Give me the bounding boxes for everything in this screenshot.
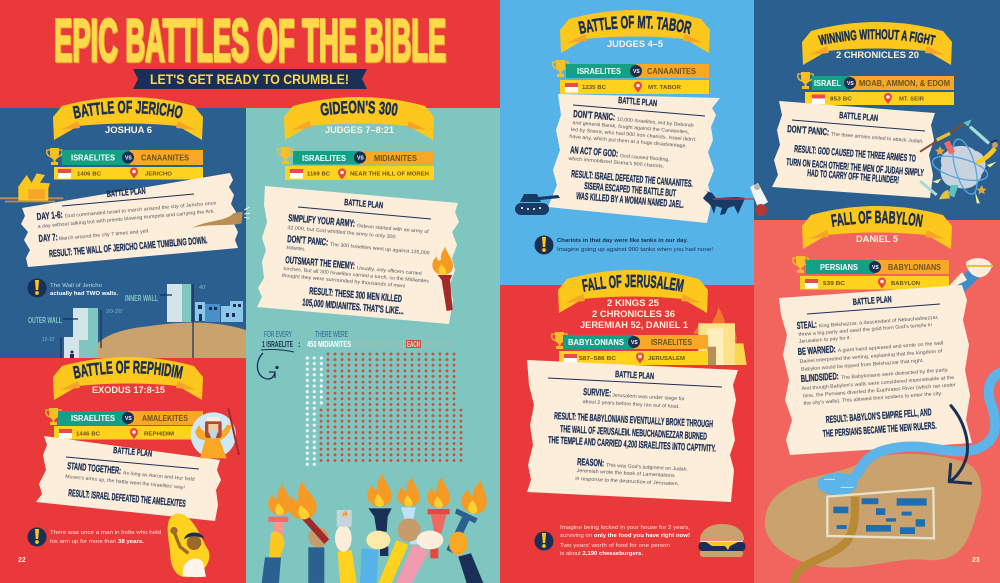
reference: JUDGES 7–8:21 <box>325 125 395 136</box>
banner: Battle of Mt. Tabor: BATTLE OF MT. TABOR <box>578 16 692 34</box>
battle plan text <box>796 311 957 440</box>
battle plan text: THE TEMPLE AND CARRIED 4,200 ISRAELITES INTO CAPTIVITY. <box>548 435 716 455</box>
battle plan text: 105,000 MIDIANITES. THAT'S LIKE... <box>302 297 404 317</box>
icon: tank <box>515 194 560 215</box>
lighter <box>335 510 357 583</box>
battle plan heading <box>548 369 722 387</box>
matchup bars: ISRAEL <box>814 79 841 88</box>
paper note <box>779 285 972 455</box>
illustration: hand writing on the wall <box>948 258 993 296</box>
references: JEREMIAH 52, DANIEL 1 <box>580 320 689 331</box>
chart: wall heights: INNER WALL <box>125 293 158 303</box>
battle plan text <box>548 387 716 488</box>
background panel: Jericho blue <box>0 108 246 358</box>
matchup bars: VS <box>872 265 879 271</box>
background panel: title red <box>0 0 500 108</box>
battle plan text: RESULT: ISRAEL DEFEATED THE AMELEKITES <box>68 488 186 510</box>
reference: 2 CHRONICLES 20 <box>836 50 919 61</box>
battle plan text: And though Babylon's walls were considered impenetrable at the <box>801 375 955 392</box>
panel: Battle of Mt. Tabor <box>515 10 754 254</box>
icon: torch <box>432 247 453 311</box>
map: sand ground <box>765 454 981 568</box>
page number: 23 <box>972 557 980 564</box>
matchup bars <box>47 148 203 180</box>
torch 6 <box>396 477 450 583</box>
matchup bars <box>793 256 949 290</box>
matchup bars: MIDIANITES <box>374 154 418 163</box>
matchup bars: VS <box>125 416 132 422</box>
battle plan text <box>65 461 195 510</box>
fact: chariots <box>534 236 714 254</box>
panel: Fall of Babylon <box>765 206 1000 583</box>
battle plan text <box>282 213 431 317</box>
matchup bars: NEAR THE HILL OF MOREH <box>350 172 429 178</box>
torch 7 <box>449 477 491 583</box>
battle plan text: DAY 7: <box>38 232 58 245</box>
battle plan text <box>786 124 924 186</box>
battle plan heading <box>298 197 431 219</box>
battle plan text: King Belshazzar, a descendant of Nebuchadnezzar, <box>819 315 939 329</box>
paper note <box>527 360 738 502</box>
matchup bars: VS <box>631 340 638 346</box>
reference: EXODUS 17:8-15 <box>92 385 166 396</box>
battle plan heading <box>792 110 925 131</box>
background panel: Rephidim red <box>0 358 246 583</box>
background panel: Gideon teal <box>246 108 500 583</box>
fact: cheeseburgers: Two years' worth of food for one person <box>560 543 670 549</box>
battle plan heading <box>807 294 940 314</box>
battle plan text: SURVIVE: <box>583 387 611 399</box>
matchup bars <box>46 408 203 440</box>
matchup bars: ISRAELITES <box>302 154 347 163</box>
chart: wall heights: 40' <box>199 285 206 291</box>
matchup bars: VS <box>633 69 640 75</box>
arrow <box>949 406 971 483</box>
matchup bars: VS <box>847 81 854 87</box>
battle plan text: which immobilized Sisera's 900 chariots. <box>568 156 664 170</box>
battle plan text: Usually, only officers carried <box>357 265 422 277</box>
battle plan text: Daniel interpreted the writing, explaining that the kingdom of <box>799 348 943 365</box>
battle plan text: have any, which put them at a huge disadvantage. <box>569 134 687 149</box>
battle plan text: Jerusalem was under siege for <box>612 393 685 402</box>
matchup bars <box>798 72 954 105</box>
banner: Fall of Babylon <box>802 206 952 249</box>
banner: Fall of Jerusalem: FALL OF JERUSALEM <box>582 274 684 292</box>
background panel: Babylon salmon <box>754 220 1000 583</box>
battle plan heading <box>66 445 199 469</box>
battle plan text: torches. But all 300 Israelites carried a torch, so the Midianites <box>283 266 430 285</box>
battle plan heading: BATTLE PLAN <box>344 197 384 210</box>
ratio label: A SINGLE ONE <box>423 340 452 349</box>
matchup bars: CANAANITES <box>647 67 697 76</box>
matchup bars: 587–586 BC <box>579 356 616 362</box>
panel: Battle of Jericho <box>0 97 250 358</box>
battle plan text: A giant hand appeared and wrote on the wall. <box>838 340 945 354</box>
background panel: Tabor sky blue <box>500 0 754 285</box>
ratio label: THERE WERE <box>315 330 348 339</box>
battle plan text: Jeremiah wrote the book of Lamentations <box>577 468 675 479</box>
river Euphrates <box>817 372 1000 495</box>
ratio label: 1 ISRAELITE <box>262 340 293 349</box>
battle plan text: STAND TOGETHER: <box>67 461 122 477</box>
matchup bars: VS <box>125 156 132 162</box>
battle plan text: REASON: <box>577 457 604 469</box>
banner: Winning Without a Fight: WINNING WITHOUT A FIGHT <box>818 29 936 46</box>
fact: cheeseburgers: Imagine being locked in your house for 2 years, <box>560 525 691 531</box>
matchup bars: CANAANITES <box>141 154 190 162</box>
banner: Fall of Babylon: FALL OF BABYLON <box>830 210 924 228</box>
icon: cheeseburger <box>698 524 746 557</box>
chart: wall heights: 20-26' <box>106 309 123 315</box>
background panel: Jerusalem red <box>500 285 754 583</box>
illustration: man with raised arm <box>168 513 209 577</box>
chart: wall heights: 12-15' <box>42 337 55 343</box>
matchup bars <box>553 60 709 94</box>
battle plan text: WAS KILLED BY A WOMAN NAMED JAEL. <box>576 191 684 211</box>
matchup bars: MT. SEIR <box>899 96 924 102</box>
battle plan text: This was God's judgment on Judah. <box>606 463 688 473</box>
reference: JUDGES 4–5 <box>607 39 664 50</box>
battle plan text: Moses's arms up, the battle went the Israelites' way! <box>65 474 185 491</box>
matchup bars: 1169 BC <box>307 172 330 178</box>
battle plan text: a day without talking but with priests blowing trumpets and carrying the Ark. <box>37 208 215 230</box>
battle plan text: RESULT: THE WALL OF JERICHO CAME TUMBLING DOWN. <box>49 235 208 260</box>
battle plan text: THE WALL OF JERUSALEM. NEBUCHADNEZZAR BURNED <box>560 424 707 443</box>
banner: Winning Without a Fight <box>802 22 952 65</box>
matchup bars <box>278 147 434 180</box>
banner: Gideon's 300: GIDEON'S 300 <box>320 100 398 116</box>
fact: chariots: Chariots in that day were like tanks in our day. <box>557 238 689 244</box>
battle plan text <box>568 109 698 211</box>
battle plan text: Jerusalem to pay for it. <box>799 335 851 345</box>
matchup bars: ISRAELITES <box>71 154 116 162</box>
matchup bars: 1406 BC <box>77 172 101 178</box>
battle plan text: God caused flooding, <box>620 153 670 163</box>
torch 2 <box>284 479 328 583</box>
matchup bars: REPHIDIM <box>144 432 174 438</box>
battle plan heading: BATTLE PLAN <box>618 95 658 108</box>
dot chart: 450 to 1 <box>304 351 464 467</box>
matchup bars: VS <box>357 156 364 162</box>
fact: cheeseburgers <box>534 525 691 557</box>
battle plan text: RESULT: ISRAEL DEFEATED THE CANAANITES. <box>571 169 693 190</box>
paper note <box>36 436 221 521</box>
fact: cheeseburgers: surviving on only the food you have right now! <box>560 533 690 539</box>
fact: two walls: The Wall of Jericho <box>50 283 102 289</box>
banner: Fall of Jerusalem <box>558 270 708 313</box>
reference: JOSHUA 6 <box>105 125 152 136</box>
subtitle ribbon: LET'S GET READY TO CRUMBLE! <box>150 72 349 87</box>
matchup bars: AMALEKITES <box>142 414 189 423</box>
matchup bars: BABYLONIANS <box>888 263 942 272</box>
ratio label: 450 MIDIANITES <box>307 340 351 349</box>
chart: wall heights: OUTER WALL <box>28 315 62 325</box>
battle plan text: the city's walls). This allowed their soldiers to enter the city. <box>803 391 942 407</box>
battle plan text: Babylon would be ripped from Belshazzar that night. <box>801 358 924 373</box>
fact: arm up: There was once a man in India who held <box>50 530 161 536</box>
matchup bars: JERICHO <box>145 172 173 178</box>
torch 4 <box>360 473 392 583</box>
battle plan text: 32,000, but God whittled the army to only 300. <box>287 225 397 241</box>
battle plan text: SISERA ESCAPED THE BATTLE BUT <box>584 181 676 200</box>
matchup bars: 539 BC <box>823 281 845 287</box>
city buildings <box>833 498 927 534</box>
paper note <box>257 186 459 324</box>
battle plan text: DON'T PANIC: <box>573 109 616 123</box>
battle plan text: The three armies united to attack Judah. <box>831 132 924 145</box>
battle plan text: Gideon started with an army of <box>357 223 429 235</box>
battle plan heading: BATTLE PLAN <box>852 294 892 307</box>
battle plan heading <box>573 95 705 116</box>
battle plan text: time, the Persians diverted the Euphrates River (which ran under <box>803 382 956 399</box>
battle plan text: Midianites. <box>286 245 306 253</box>
battle plan text: about 2 years before they ran out of food. <box>582 399 680 410</box>
battle plan text: DAY 1-6: <box>36 210 63 223</box>
matchup bars: JERUSALEM <box>648 356 685 362</box>
page number: 22 <box>18 557 26 564</box>
fact: two walls: actually had TWO walls. <box>50 291 119 297</box>
matchup bars <box>552 332 708 365</box>
battle plan heading: BATTLE PLAN <box>615 369 654 381</box>
battle plan text: STEAL: <box>796 320 817 332</box>
illustration: chariot rider <box>750 183 768 216</box>
battle plan text: HAD TO CARRY OFF THE PLUNDER! <box>807 168 899 186</box>
banner: Battle of Jericho: BATTLE OF JERICHO <box>72 100 183 119</box>
ratio label: EACH <box>407 340 420 349</box>
arrow: swirl <box>257 350 294 379</box>
battle plan text: The Babylonians were distracted by the party. <box>841 367 949 381</box>
chart: wall heights <box>28 284 246 358</box>
battle plan text: 10,000 Israelites, led by Deborah <box>617 117 694 129</box>
battle plan heading: BATTLE PLAN <box>113 445 153 459</box>
battle plan text: and general Barak, fought against the Canaanites, <box>572 120 689 136</box>
battle plan heading: BATTLE PLAN <box>106 186 146 199</box>
banner: Battle of Jericho <box>53 97 203 140</box>
icon: donkey and chariot straps <box>703 190 754 215</box>
fact: chariots: Imagine going up against 900 tanks when you had none! <box>557 247 714 253</box>
banner: Gideon's 300 <box>284 97 434 140</box>
illustration: burning city <box>693 307 747 365</box>
fact: two walls <box>28 278 119 298</box>
paper note <box>548 94 720 223</box>
battle plan heading <box>62 186 194 206</box>
text: EPIC BATTLES OF THE BIBLE <box>54 7 446 74</box>
battle plan text: BE WARNED: <box>797 344 836 358</box>
matchup bars: MOAB, AMMON, & EDOM <box>859 79 950 88</box>
reference: DANIEL 5 <box>856 234 899 245</box>
battle plan text: in response to the destruction of Jerusalem. <box>575 476 679 487</box>
battle plan text: SIMPLIFY YOUR ARMY: <box>288 213 355 230</box>
battle plan text: DON'T PANIC: <box>287 234 329 249</box>
battle plan text: threw a big party and used the gold from God's temple in <box>798 322 933 338</box>
banner: Battle of Rephidim <box>53 357 203 400</box>
battle plan text: The 300 Israelites went up against 135,000 <box>330 242 430 256</box>
panel: Winning Without a Fight <box>750 22 998 216</box>
subtitle ribbon <box>133 69 367 89</box>
dry riverbed <box>793 497 855 583</box>
matchup bars: PERSIANS <box>820 263 859 272</box>
fact: arm up <box>28 528 161 546</box>
fact: arm up: his arm up for more than 38 years. <box>50 539 145 545</box>
battle plan text: BLINDSIDED: <box>800 371 839 385</box>
matchup bars: ISRAELITES <box>651 338 693 347</box>
battle plan heading: BATTLE PLAN <box>839 110 879 123</box>
panel: Fall of Jerusalem <box>527 270 747 557</box>
matchup bars: 1235 BC <box>582 85 606 91</box>
references: 2 CHRONICLES 36 <box>592 309 675 320</box>
panel: Gideon's 300 <box>256 97 487 583</box>
battle plan text: AN ACT OF GOD: <box>570 145 618 160</box>
icon: ram's horn <box>192 207 250 228</box>
matchup bars: BABYLONIANS <box>568 338 625 347</box>
matchup bars: BABYLON <box>891 281 920 287</box>
icon: ark of the covenant <box>0 173 63 202</box>
illustration: raised torches <box>262 473 491 583</box>
battle plan text: March around the city 7 times and yell. <box>58 228 150 242</box>
illustration: Moses <box>191 408 239 458</box>
references <box>580 298 689 331</box>
paper note <box>772 101 935 198</box>
city walls <box>827 488 934 538</box>
battle plan text: RESULT: THE BABYLONIANS EVENTUALLY BROKE THROUGH <box>554 411 713 430</box>
fact: cheeseburgers: is about 2,190 cheeseburgers. <box>560 551 644 557</box>
battle plan text: As long as Aaron and Hur held <box>123 470 195 483</box>
matchup bars: ISRAELITES <box>71 414 116 423</box>
battle plan text <box>36 196 220 261</box>
ratio label: FOR EVERY <box>264 330 292 339</box>
matchup bars: ISRAELITES <box>577 67 622 76</box>
battle plan text: OUTSMART THE ENEMY: <box>285 255 355 272</box>
battle plan text: DON'T PANIC: <box>787 124 830 138</box>
matchup bars: MT. TABOR <box>648 85 681 91</box>
banner: Battle of Mt. Tabor <box>560 10 710 53</box>
ratio label: : <box>298 340 301 349</box>
torch 5 <box>378 477 421 583</box>
battle plan text: led by Sisera, who had 900 iron chariots. Israel didn't <box>571 127 696 143</box>
matchup bars: 853 BC <box>830 96 852 102</box>
illustration: battle cloud and weapons <box>920 119 998 203</box>
battle plan text: thought they were surrounded by thousands of men! <box>282 273 406 290</box>
ratio label <box>262 330 452 349</box>
battle plan text: RESULT: THESE 300 MEN KILLED <box>309 286 402 305</box>
torch 1 <box>262 483 291 583</box>
background panel: Winning blue <box>754 0 1000 220</box>
battle plan text: God commanded Israel to march around the city of Jericho once <box>65 200 217 220</box>
map: rivers, city and arrow <box>793 372 1000 583</box>
matchup bars: 1446 BC <box>76 432 100 438</box>
paper note <box>21 173 238 267</box>
ratio label: WHO WERE READY TO <box>353 340 406 349</box>
panel: Battle of Rephidim <box>18 357 240 578</box>
banner: Battle of Rephidim: BATTLE OF REPHIDIM <box>72 360 184 379</box>
references: 2 KINGS 25 <box>607 298 660 309</box>
